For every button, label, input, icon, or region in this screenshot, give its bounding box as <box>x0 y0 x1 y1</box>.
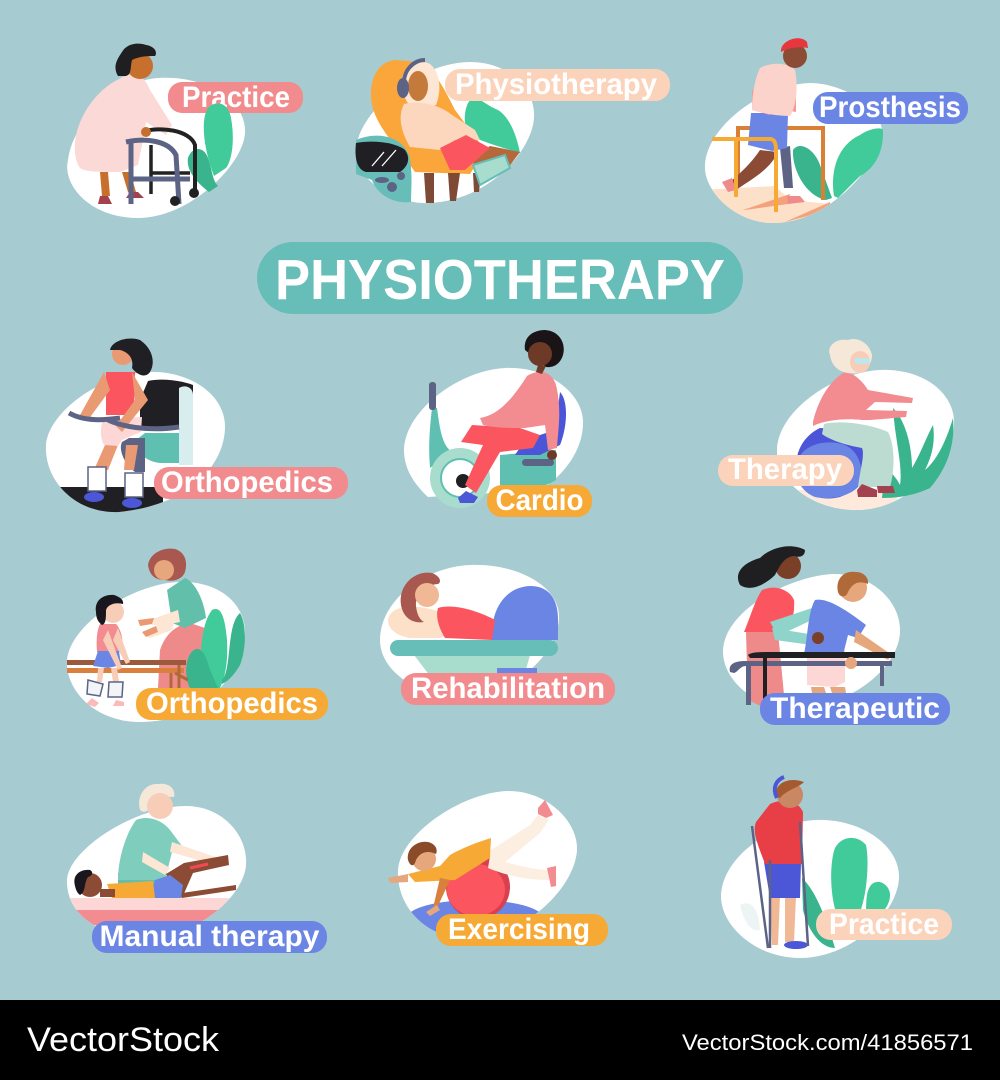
footer: watermark bar: VectorStock.com/41856571 <box>682 1030 973 1055</box>
illustration: therapist supporting man at bars <box>730 546 895 708</box>
label: Orthopedics: Orthopedics <box>146 687 318 720</box>
label: Practice: Practice <box>182 81 290 114</box>
panel: cardio <box>404 330 592 517</box>
illustration: woman with walker <box>75 44 233 206</box>
title: PHYSIOTHERAPY <box>275 248 725 312</box>
illustration: elderly woman on gym ball <box>798 339 954 510</box>
illustration: woman in massage chair <box>355 60 520 203</box>
panel: practice with walker <box>67 44 303 218</box>
panel: therapeutic <box>723 546 950 725</box>
label: Physiotherapy: Physiotherapy <box>455 68 657 101</box>
illustration: boy on crutches beside plants <box>740 777 890 949</box>
illustration: man with prosthetic leg on parallel bars <box>700 38 883 230</box>
panel: prosthesis <box>700 38 968 230</box>
label: Orthopedics: Orthopedics <box>161 466 333 499</box>
panel: manual therapy <box>60 784 327 953</box>
illustration: child with therapist at bars <box>67 549 245 707</box>
label: Therapeutic: Therapeutic <box>770 692 940 725</box>
footer: watermark bar: VectorStock <box>27 1021 220 1059</box>
label: Cardio: Cardio <box>496 484 584 517</box>
label: Exercising: Exercising <box>448 913 590 946</box>
panel: therapy ball <box>718 339 954 512</box>
label: Manual therapy: Manual therapy <box>100 920 320 953</box>
label: Therapy: Therapy <box>728 453 842 486</box>
label: Rehabilitation: Rehabilitation <box>411 672 605 705</box>
illustration: therapist stretching patient's leg <box>70 784 236 926</box>
panel: practice crutches <box>721 777 952 958</box>
illustration: woman in scanner <box>388 573 558 676</box>
panel: physiotherapy chair <box>355 60 670 203</box>
illustration: woman on stationary bike <box>429 330 566 508</box>
panel: orthopedics machine <box>46 338 348 517</box>
illustration: man balancing on exercise ball <box>388 800 556 936</box>
panel: exercising <box>388 791 608 946</box>
panel: orthopedics child <box>67 549 328 722</box>
label: Prosthesis: Prosthesis <box>819 91 961 124</box>
label: Practice: Practice <box>829 908 939 941</box>
illustration: woman on exercise machine <box>60 338 193 512</box>
footer: watermark bar <box>0 1000 1000 1080</box>
panel: rehabilitation <box>380 565 615 705</box>
